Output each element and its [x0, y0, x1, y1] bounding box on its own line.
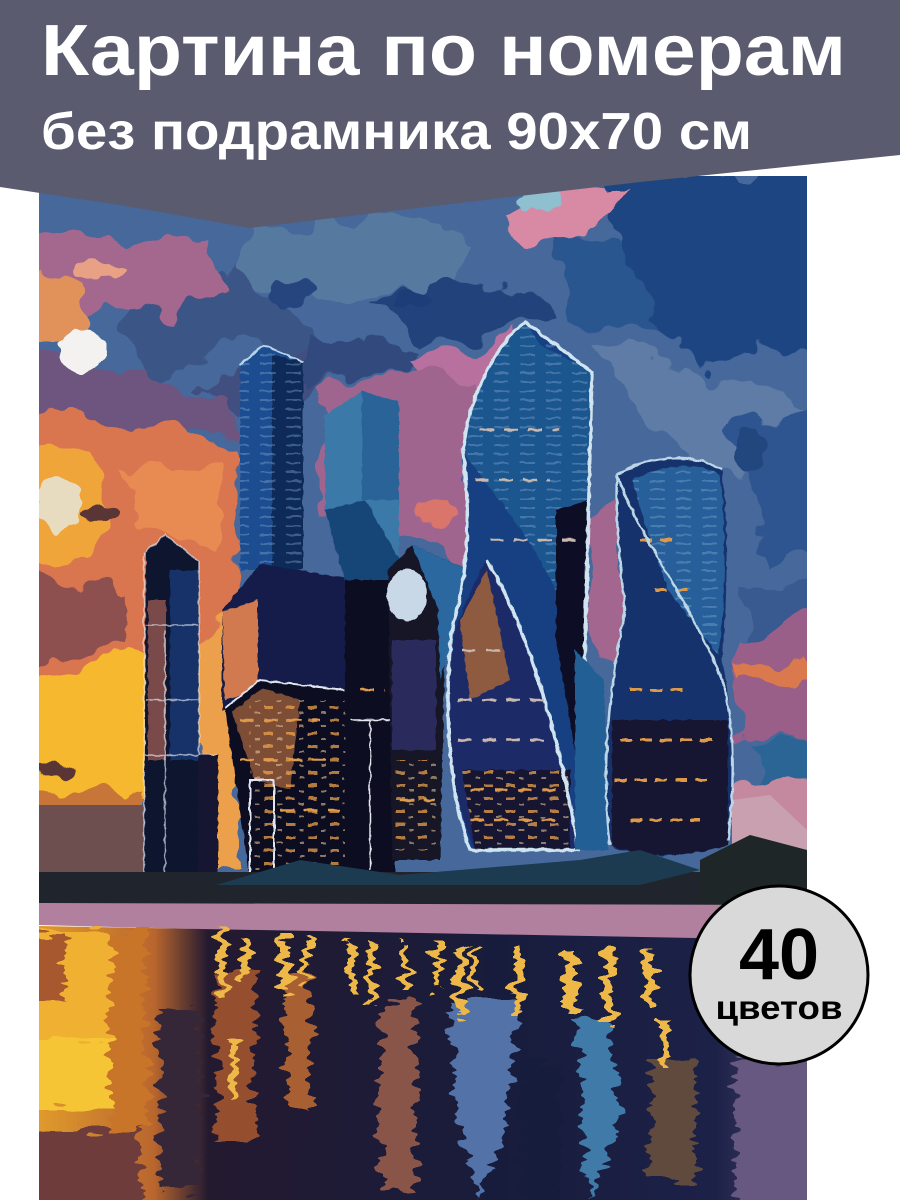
window lights [240, 430, 575, 820]
badge: 40 colours: 40 [739, 915, 819, 995]
distant buildings left [39, 805, 144, 875]
tower: twisted evolution tower [448, 322, 608, 850]
cloud highlights [38, 186, 766, 778]
distant buildings right [732, 795, 807, 850]
clouds: orange sunset glow [20, 270, 240, 870]
embankment trees [39, 872, 700, 905]
tower: far left slim tower [144, 534, 218, 895]
tower: right twisted tower [606, 458, 733, 856]
tower: centre cube tower [325, 391, 400, 880]
subtitle: без подрамника 90х70 см [41, 103, 752, 161]
sky background [39, 176, 807, 916]
tower: centre arched tower [386, 545, 463, 861]
clouds: dark blue [120, 176, 830, 795]
clouds: pink and purple [20, 185, 830, 860]
badge: 40 colours [690, 886, 868, 1064]
water light streaks [218, 935, 668, 1100]
header banner [0, 0, 900, 228]
water reflections [20, 930, 825, 1200]
tower: tall block with podium [222, 345, 345, 880]
water [39, 926, 807, 1200]
title: Картина по номерам [41, 11, 846, 91]
painting: Moscow City skyline [20, 176, 830, 1200]
badge: 40 colours: цветов [716, 989, 842, 1026]
embankment pink strip [39, 903, 722, 938]
